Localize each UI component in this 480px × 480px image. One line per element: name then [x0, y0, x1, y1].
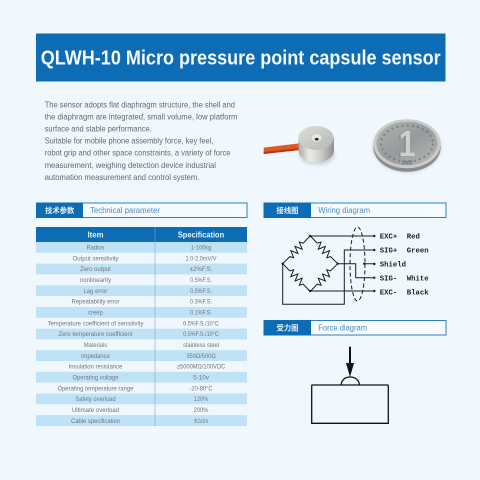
section header: technical parameter: Technical parameter	[90, 206, 160, 215]
product photo: coin for scale	[373, 119, 441, 172]
wire labels: EXC-	[380, 290, 397, 298]
table rows text: 1.0-2.0mV/V	[186, 255, 217, 262]
intro text block: The sensor adopts flat diaphragm structure, the shell and	[45, 99, 235, 109]
table rows text: Repeatability error	[72, 299, 120, 306]
wire labels: White	[407, 276, 429, 284]
section header: wiring diagram: Wiring diagram	[318, 206, 370, 215]
table rows text: 1-100kg	[191, 245, 212, 252]
section header: wiring diagram: 接线图	[277, 206, 298, 215]
intro text block	[45, 99, 237, 182]
table rows text: -20-80°C	[190, 384, 213, 392]
connection dots	[282, 235, 375, 292]
specification table	[36, 227, 247, 426]
wire labels: Red	[407, 234, 420, 242]
intro text block: robot grip and other space constraints, a variety of force	[45, 148, 231, 158]
wiring diagram	[282, 227, 429, 304]
table rows text: 200%	[194, 407, 209, 414]
table rows text: 5-10v	[193, 374, 210, 382]
table rows text: Materials	[84, 342, 107, 349]
section header: force diagram: Force diagram	[318, 323, 367, 332]
product photo: capsule sensor with cable	[264, 126, 335, 165]
arrow: applied force	[346, 347, 354, 377]
table rows text: Radius	[87, 245, 104, 252]
table rows text: Output sensitivity	[72, 255, 119, 262]
table rows text: 350Ω/500Ω	[186, 353, 216, 360]
table rows text: Insulation resistance	[69, 364, 123, 371]
title banner: QLWH-10 Micro pressure point capsule sensor	[41, 47, 441, 69]
section header: force diagram: 受力图	[277, 324, 298, 333]
wire labels: Black	[407, 290, 429, 298]
force diagram	[312, 347, 388, 423]
table rows text	[48, 245, 225, 425]
table rows text: Lag error	[84, 288, 108, 295]
product photo: coin for scale: 2002	[401, 160, 413, 166]
product photo: coin for scale: 1	[398, 124, 416, 164]
table rows text: 120%	[194, 396, 209, 403]
table rows text: 0.1%F.S.	[190, 310, 212, 316]
table rows text: Operating voltage	[72, 374, 119, 382]
table rows text: Temperature coefficient of sensitivity	[48, 320, 144, 327]
table rows text: stainless steel	[183, 342, 219, 349]
intro text block: measurement, weighing detection device industrial	[45, 160, 216, 170]
table rows text: 0.5%F.S.	[190, 288, 212, 295]
table rows text: Zero temperature coefficient	[58, 331, 133, 338]
table header: Item	[88, 230, 104, 240]
wire labels: Green	[407, 248, 429, 256]
table rows text: impedance	[81, 353, 110, 360]
bridge circuit	[283, 227, 374, 304]
wire labels	[380, 234, 429, 298]
table header: Specification	[178, 230, 224, 240]
table header	[36, 227, 247, 242]
title banner	[36, 34, 446, 82]
table rows text: Operating temperature range	[58, 385, 134, 392]
table row stripes	[36, 242, 247, 426]
wire labels: EXC+	[380, 234, 398, 242]
table rows text: Ultimate overload	[72, 407, 120, 414]
table rows text: 0.5%F.S.	[190, 277, 212, 284]
wire labels: Shield	[380, 262, 406, 270]
table rows text: Φ2x1m	[194, 418, 208, 425]
section header: technical parameter	[36, 202, 247, 218]
table rows text: ≥5000MΩ/100VDC	[177, 364, 225, 371]
section header: force diagram	[264, 320, 446, 336]
table rows text: 0.3%F.S.	[190, 299, 212, 306]
product photo: coin for scale: 1	[398, 124, 414, 165]
table rows text: Zero output	[80, 266, 111, 273]
intro text block: Suitable for mobile phone assembly force, key feel,	[45, 136, 213, 146]
table rows text: Cable specification	[71, 418, 120, 425]
dome and body	[312, 377, 388, 423]
table rows text: creep	[88, 310, 103, 316]
table rows text: 0.5%F.S./10°C	[183, 330, 219, 338]
wire labels: SIG+	[380, 248, 398, 256]
intro text block: automation measurement and control system.	[45, 172, 199, 182]
table rows text: ±2%F.S.	[190, 266, 213, 273]
intro text block: surface and stable performance.	[45, 124, 152, 134]
section header: wiring diagram	[264, 202, 446, 218]
table rows text: nonlinearity	[80, 277, 112, 284]
section header: technical parameter: 技术参数	[45, 206, 75, 215]
intro text block: the diaphragm are integrated, small volume, low platform	[45, 111, 237, 121]
wire labels: SIG-	[380, 276, 397, 284]
table rows text: Safety overload	[75, 396, 116, 403]
table rows text: 0.5%F.S./10°C	[183, 319, 219, 327]
